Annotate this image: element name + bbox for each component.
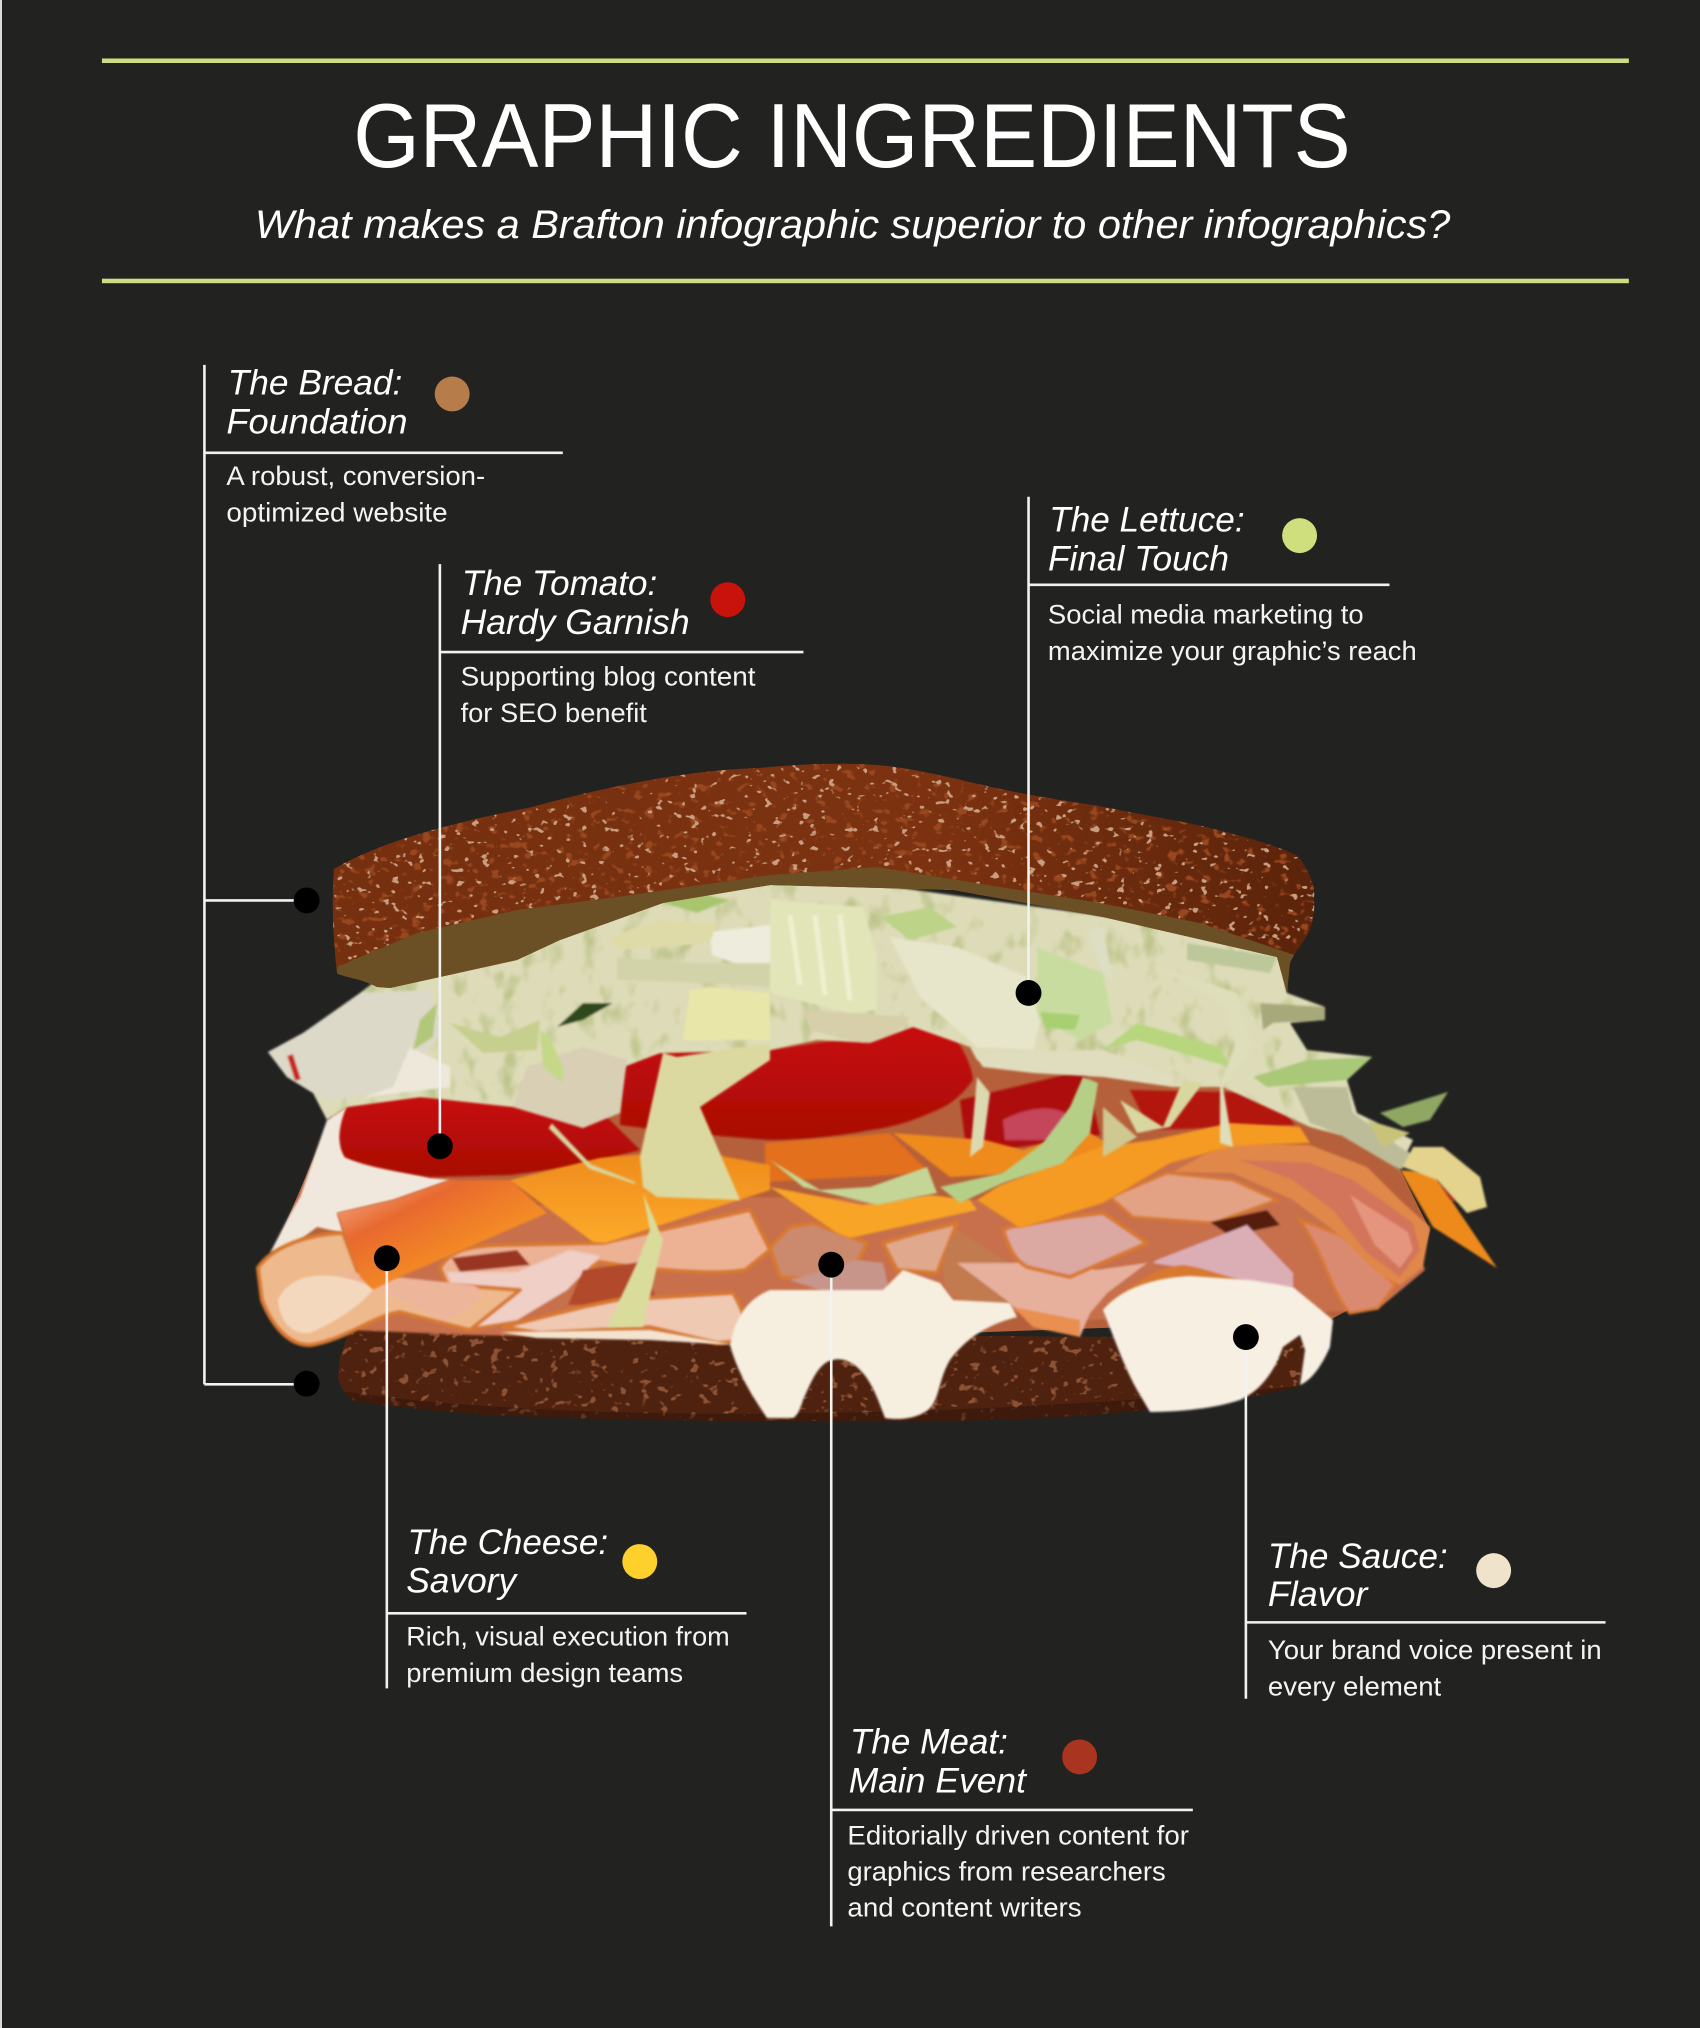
tomato heading: The Tomato: — [462, 563, 657, 603]
top bread — [325, 755, 1325, 1000]
label: The Sauce — [1233, 1324, 1606, 1701]
ham slice pink — [1153, 1225, 1293, 1287]
lettuce: hanging leaf — [640, 1043, 770, 1200]
bread crumb underside — [337, 867, 1300, 1000]
lettuce: right top fringe — [1260, 1003, 1325, 1030]
lettuce: pale curl right — [1147, 963, 1253, 1147]
header — [102, 58, 1629, 283]
ham layer — [258, 1143, 1430, 1345]
lettuce: green shreds right — [1103, 1023, 1230, 1067]
sauce: right pool — [1103, 1276, 1333, 1412]
lettuce: small wedge — [1103, 1107, 1137, 1157]
sauce colour dot — [1476, 1553, 1511, 1588]
sandwich illustration — [258, 755, 1497, 1430]
marker: cheese — [374, 1245, 400, 1271]
marker: bread bottom — [294, 1371, 320, 1397]
bread heading: The Bread: — [228, 363, 402, 403]
lettuce: green strand — [540, 1030, 563, 1083]
sauce — [500, 1270, 1333, 1419]
ham dark gap — [1210, 1210, 1280, 1236]
lettuce: dark gap — [557, 1003, 613, 1027]
ham inner pink — [447, 1250, 600, 1328]
bread colour dot — [435, 376, 470, 411]
ham fold: far left — [258, 1233, 520, 1345]
lettuce: small strand — [550, 1125, 635, 1183]
tomato colour dot — [710, 582, 745, 617]
cheese: middle slice — [770, 1187, 977, 1238]
label: The Lettuce: maximize your graphic’s reach — [1048, 636, 1417, 666]
lettuce: pale large piece — [513, 1047, 627, 1128]
marker: bread top — [294, 888, 320, 913]
meat heading: The Meat: — [850, 1722, 1008, 1762]
lettuce: yellow tuft — [1367, 1120, 1410, 1147]
lettuce: right yellow fringe — [1403, 1147, 1487, 1213]
tomato slices — [340, 1023, 1295, 1177]
cheese: left slice — [337, 1180, 547, 1290]
lettuce: yellow-green curl — [450, 1020, 540, 1053]
lettuce: hanging strand centre — [970, 1077, 990, 1157]
ham fold: rim — [943, 1230, 1020, 1306]
lettuce: pale strip — [973, 1050, 1173, 1087]
label: The Bread: optimized website — [226, 497, 448, 527]
lettuce: yellow leaf — [683, 987, 770, 1040]
tomato: right outer — [1130, 1090, 1295, 1130]
sauce: cream strip — [500, 1330, 735, 1345]
bottom bread — [338, 1329, 1306, 1421]
ham fold: large right loop — [1173, 1143, 1430, 1285]
subtitle: What makes a Brafton infographic superior to other infographics? — [255, 203, 1451, 247]
label: The Bread — [204, 363, 563, 1397]
lettuce: central leaf — [770, 900, 877, 1013]
label: The Bread: Foundation — [226, 401, 408, 441]
lettuce: green leaf right — [1253, 1057, 1372, 1087]
cheese body: Rich, visual execution from — [406, 1622, 730, 1652]
label: The Sauce: Flavor — [1268, 1574, 1370, 1614]
ham fold: big pink — [957, 1263, 1147, 1337]
lettuce: long hanging strand — [607, 1193, 663, 1327]
label: The Lettuce — [1016, 497, 1417, 1006]
lettuce: green top right — [880, 907, 957, 940]
cheese: back centre — [893, 1130, 1110, 1177]
left mayo — [270, 1107, 450, 1253]
lettuce: mayo centre — [710, 925, 860, 975]
label: The Lettuce: Final Touch — [1048, 539, 1229, 579]
label: The Tomato: Hardy Garnish — [461, 602, 690, 642]
lettuce: shreds — [1087, 927, 1113, 980]
lettuce heading: The Lettuce: — [1049, 500, 1245, 540]
cheese: second slice — [510, 1150, 770, 1243]
lettuce: base mass — [268, 870, 1413, 1167]
cheese colour dot — [622, 1544, 657, 1579]
tomato: centre — [620, 1023, 973, 1140]
bread body: A robust, conversion- — [226, 461, 485, 491]
label: The Cheese: premium design teams — [406, 1658, 683, 1688]
ham mid band — [1110, 1173, 1277, 1223]
label: The Tomato: for SEO benefit — [461, 698, 648, 728]
ham fold: centre lower — [790, 1260, 890, 1297]
sauce: centre drips — [730, 1270, 1017, 1419]
lettuce: green top — [663, 893, 730, 913]
lettuce: right fringe leaf — [1380, 1092, 1448, 1127]
lettuce: under leaf pale — [803, 1010, 910, 1043]
lettuce: mayo above left tomato — [363, 1047, 450, 1097]
lettuce: curl lower right — [1120, 1080, 1203, 1133]
lettuce: green right cluster — [1037, 947, 1113, 1040]
cheese — [337, 1123, 1497, 1290]
ham shadow left — [452, 1250, 530, 1272]
lettuce — [260, 860, 1487, 1327]
marker: tomato — [427, 1133, 453, 1159]
marker: sauce — [1233, 1324, 1259, 1350]
cheese: main right slice — [977, 1123, 1310, 1228]
lettuce: strip over cheese — [770, 1160, 937, 1205]
ham fold: centre right — [883, 1223, 957, 1273]
ham fold: pink loop — [1003, 1213, 1147, 1277]
lettuce: pale top left — [610, 920, 717, 950]
label: The Cheese — [374, 1245, 746, 1688]
ham fold: left upper pink — [440, 1210, 770, 1330]
marker: lettuce — [1016, 980, 1041, 1006]
sauce body: Your brand voice present in — [1268, 1635, 1602, 1665]
label: The Meat: Main Event — [849, 1761, 1028, 1801]
ham fold: far left inner — [278, 1276, 375, 1333]
lettuce: upper-left curl — [268, 990, 440, 1100]
label: The Meat: graphics from researchers — [847, 1856, 1166, 1886]
ham shadow middle — [568, 1262, 655, 1305]
ham under right — [1300, 1220, 1395, 1313]
lettuce: green strand rising — [940, 1077, 1098, 1203]
label: The Cheese: Savory — [406, 1561, 518, 1601]
cheese: right sliver — [1400, 1170, 1497, 1268]
lettuce body: Social media marketing to — [1048, 600, 1364, 630]
sandwich base fill — [270, 960, 1430, 1340]
ham orange band over pool — [1105, 1265, 1250, 1310]
lettuce: texture — [337, 885, 1336, 1134]
marker: meat — [818, 1252, 844, 1278]
ham fold: lower — [503, 1293, 747, 1343]
meat body: Editorially driven content for — [847, 1820, 1189, 1850]
ham right loop inner — [1240, 1160, 1420, 1277]
lettuce: big pale leaf — [890, 937, 1040, 1050]
ham base — [340, 1150, 1425, 1340]
lettuce: green tuft — [413, 1003, 437, 1050]
ham fold: centre loop — [770, 1223, 867, 1280]
lettuce: right pale — [1293, 1087, 1417, 1170]
cheese heading: The Cheese: — [408, 1522, 608, 1562]
meat colour dot — [1062, 1739, 1097, 1774]
cheese: back — [765, 1133, 930, 1182]
label: The Sauce: every element — [1268, 1671, 1442, 1701]
lettuce colour dot — [1282, 518, 1317, 553]
label: The Meat — [818, 1252, 1193, 1926]
lettuce: grey green top right — [1187, 943, 1277, 973]
tomato body: Supporting blog content — [461, 662, 756, 692]
tomato: left — [340, 1094, 640, 1177]
sauce heading: The Sauce: — [1268, 1536, 1448, 1576]
tomato: right inner — [960, 1070, 1100, 1150]
label: The Meat: and content writers — [847, 1893, 1082, 1923]
lettuce: pale band — [617, 957, 770, 987]
left edge strip — [0, 0, 2, 2028]
title: GRAPHIC INGREDIENTS — [353, 86, 1351, 187]
label: The Tomato — [427, 563, 803, 1159]
